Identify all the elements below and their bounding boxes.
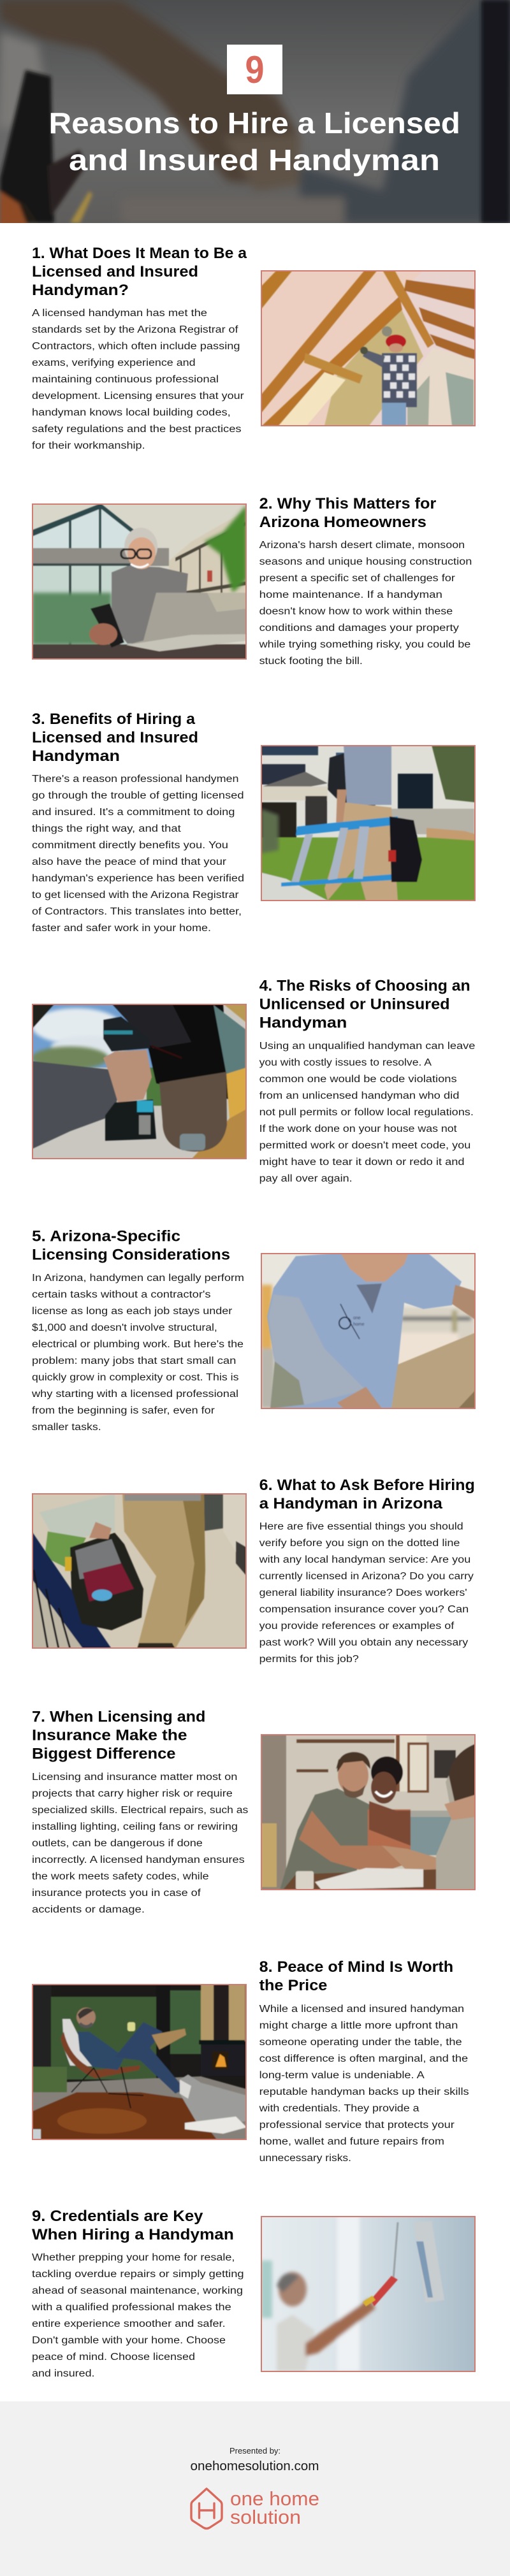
body text 7: Licensing and insurance matter most on [32, 1772, 237, 1783]
panel: section 8 [32, 1958, 469, 2164]
heading 7: Biggest Difference [32, 1745, 176, 1763]
body text 8: professional service that protects your [259, 2120, 455, 2131]
heading 1: Handyman? [32, 282, 129, 299]
body text 6: you provide references or examples of [259, 1621, 455, 1632]
heading 4: Handyman [259, 1015, 347, 1031]
body text 7: installing lighting, ceiling fans or rewiring [32, 1821, 238, 1832]
body text 8: with credentials. They provide a [258, 2103, 419, 2114]
body text 3: of Contractors. This translates into better, [32, 906, 242, 917]
photo: handyman carrying ladder [261, 745, 476, 901]
icon: house with H [191, 2489, 222, 2529]
body text 2: Arizona's harsh desert climate, monsoon [259, 540, 465, 551]
body text 1: development. Licensing ensures that your [32, 391, 244, 402]
body text 4: pay all over again. [259, 1173, 353, 1184]
body text 4 [259, 1041, 475, 1184]
body text 7: insurance protects you in case of [32, 1888, 201, 1899]
body text 2: conditions and damages your property [259, 623, 459, 633]
logo wordmark: one home [230, 2487, 319, 2510]
body text 7: specialized skills. Electrical repairs, such as [32, 1805, 249, 1816]
heading 2: Arizona Homeowners [259, 514, 426, 531]
body text 8 [258, 2004, 469, 2164]
body text 5: license as long as each job stays under [32, 1306, 232, 1317]
heading 1: 1. What Does It Mean to Be a [32, 245, 247, 262]
heading 4: 4. The Risks of Choosing an [259, 978, 470, 994]
body text 4: common one would be code violations [259, 1074, 457, 1085]
body text 9: entire experience smoother and safer. [32, 2319, 226, 2329]
body text 8: home, wallet and future repairs from [259, 2136, 444, 2147]
body text 3: commitment directly benefits you. You [32, 840, 228, 851]
body text 3 [32, 774, 244, 934]
body text 3: things the right way, and that [32, 823, 182, 834]
body text 2: while trying something risky, you could be [258, 639, 470, 650]
panel: section 4 [32, 978, 475, 1184]
body text 1: for their workmanship. [32, 440, 145, 451]
heading 4 [259, 978, 470, 1031]
body text 4: might have to tear it down or redo it and [259, 1157, 465, 1168]
heading 7 [32, 1708, 205, 1763]
photo: worker in branded shirt: one [353, 1316, 361, 1321]
website url: onehomesolution.com [190, 2459, 319, 2473]
body text 1: exams, verifying experience and [32, 358, 196, 368]
logo wordmark [230, 2487, 319, 2528]
photo: woman with phone and laptop [32, 503, 247, 659]
body text 3: to get licensed with the Arizona Registrar [32, 890, 239, 901]
body text 3: handyman's experience has been verified [32, 873, 244, 884]
body text 6: currently licensed in Arizona? Do you carry [259, 1571, 474, 1582]
logo wordmark: solution [230, 2506, 301, 2528]
body text 2: stuck footing the bill. [259, 656, 363, 667]
heading 2 [259, 495, 436, 531]
body text 8: reputable handyman backs up their skills [259, 2087, 469, 2097]
body text 7: the work meets safety codes, while [32, 1871, 209, 1882]
body text 8: might charge a little more upfront than [259, 2020, 458, 2031]
panel: section 2 [32, 495, 472, 667]
heading 3: 3. Benefits of Hiring a [32, 711, 196, 728]
body text 5: smaller tasks. [32, 1422, 101, 1433]
body text 6: with any local handyman service: Are you [258, 1554, 470, 1565]
body text 3: go through the trouble of getting licensed [32, 790, 244, 801]
body text 1: standards set by the Arizona Registrar of [32, 324, 238, 335]
body text 8: long-term value is undeniable. A [259, 2070, 425, 2081]
heading 5: 5. Arizona-Specific [32, 1227, 180, 1245]
body text 1: Contractors, which often include passing [32, 341, 240, 352]
photo: painter with roller [261, 2216, 476, 2371]
photo: attic insulation [261, 270, 476, 426]
body text 9: with a qualified professional makes the [31, 2302, 231, 2313]
photo: worker in branded shirt [261, 1253, 476, 1408]
photo: cordless drill at mailbox [32, 1004, 247, 1159]
body text 9: tackling overdue repairs or simply getting [32, 2269, 244, 2280]
body text 4: permitted work or doesn't meet code, you [259, 1140, 470, 1151]
heading 3 [32, 711, 198, 765]
heading 9 [32, 2208, 234, 2243]
body text 1: maintaining continuous professional [32, 374, 219, 385]
body text 5: In Arizona, handymen can legally perform [32, 1273, 244, 1284]
body text 1 [32, 308, 244, 451]
body text 8: someone operating under the table, the [259, 2037, 462, 2048]
panel: section 3 [32, 711, 476, 934]
heading 8 [259, 1958, 453, 1994]
body text 3: There's a reason professional handymen [32, 774, 238, 785]
body text 4: you with costly issues to resolve. A [259, 1057, 432, 1068]
photo: legs and tool bag on steps [32, 1493, 247, 1649]
body text 7 [32, 1772, 249, 1915]
panel: section 9 [31, 2208, 476, 2379]
body text 5: certain tasks without a contractor's [32, 1289, 211, 1300]
body text 6: verify before you sign on the dotted line [259, 1538, 460, 1549]
photo: man relaxing by wood stove [32, 1984, 247, 2139]
body text 6 [258, 1521, 474, 1665]
heading 1 [32, 245, 247, 299]
body text 9 [31, 2252, 244, 2379]
body text 9: Whether prepping your home for resale, [32, 2252, 235, 2263]
panel: section 5 [31, 1227, 476, 1433]
heading 3: Licensed and Insured [32, 729, 198, 746]
body text 9: ahead of seasonal maintenance, working [32, 2285, 243, 2296]
body text 8: unnecessary risks. [259, 2153, 351, 2164]
heading 7: 7. When Licensing and [32, 1708, 205, 1726]
logo: one home solution [191, 2487, 319, 2529]
heading 9: When Hiring a Handyman [32, 2226, 234, 2243]
body text 4: If the work done on your house was not [259, 1124, 457, 1134]
body text 7: accidents or damage. [32, 1904, 145, 1915]
body text 2 [258, 540, 472, 667]
heading 5 [32, 1227, 230, 1263]
body text 9: peace of mind. Choose licensed [32, 2352, 195, 2363]
body text 5: electrical or plumbing work. But here's the [32, 1339, 244, 1350]
badge with number 9: 9 [245, 48, 264, 91]
photo: worker in branded shirt: home [353, 1322, 365, 1327]
body text 1: A licensed handyman has met the [32, 308, 207, 319]
photo: couple shaking hands in kitchen [261, 1734, 476, 1890]
body text 8: cost difference is often marginal, and the [259, 2053, 468, 2064]
body text 9: Don't gamble with your home. Choose [32, 2335, 226, 2346]
body text 7: incorrectly. A licensed handyman ensures [32, 1855, 245, 1865]
panel: section 1 [32, 245, 476, 451]
presented by label: Presented by: [229, 2447, 280, 2456]
body text 7: projects that carry higher risk or require [32, 1788, 233, 1799]
body text 8: While a licensed and insured handyman [259, 2004, 464, 2015]
heading 5: Licensing Considerations [32, 1247, 230, 1263]
heading 1: Licensed and Insured [32, 263, 198, 280]
body text 2: home maintenance. If a handyman [259, 590, 442, 600]
heading 8: the Price [259, 1977, 327, 1994]
heading 4: Unlicensed or Uninsured [259, 995, 450, 1013]
body text 5: quickly grow in complexity or cost. This is [32, 1372, 239, 1383]
heading 9: 9. Credentials are Key [32, 2208, 203, 2225]
body text 3: faster and safer work in your home. [32, 923, 211, 934]
body text 1: handyman knows local building codes, [32, 407, 231, 418]
body text 4: not pull permits or follow local regulations. [259, 1107, 474, 1118]
body text 5: $1,000 and doesn't involve structural, [32, 1322, 217, 1333]
body text 5: why starting with a licensed professional [31, 1389, 238, 1400]
body text 3: also have the peace of mind that your [32, 857, 226, 867]
heading 6 [259, 1477, 475, 1512]
body text 5: from the beginning is safer, even for [32, 1405, 215, 1416]
body text 9: and insured. [32, 2368, 94, 2379]
body text 4: from an unlicensed handyman who did [259, 1090, 459, 1101]
panel: section 7 [32, 1708, 476, 1915]
title [48, 106, 460, 177]
body text 2: doesn't know how to work within these [259, 606, 453, 617]
heading 7: Insurance Make the [32, 1727, 187, 1744]
body text 2: seasons and unique housing construction [259, 556, 472, 567]
header banner [0, 0, 510, 280]
body text 6: compensation insurance cover you? Can [259, 1604, 469, 1615]
body text 6: general liability insurance? Does workers' [259, 1588, 467, 1598]
body text 1: safety regulations and the best practices [32, 424, 242, 435]
body text 6: permits for this job? [259, 1654, 359, 1665]
title: and Insured Handyman [69, 143, 440, 177]
heading 8: 8. Peace of Mind Is Worth [259, 1958, 453, 1976]
body text 5 [31, 1273, 244, 1433]
body text 7: outlets, can be dangerous if done [32, 1838, 203, 1849]
body text 2: present a specific set of challenges for [259, 573, 455, 584]
panel: section 6 [32, 1477, 475, 1665]
body text 6: Here are five essential things you should [259, 1521, 463, 1532]
title: Reasons to Hire a Licensed [48, 106, 460, 140]
body text 6: past work? Will you obtain any necessary [259, 1637, 468, 1648]
body text 4: Using an unqualified handyman can leave [259, 1041, 475, 1052]
footer panel [0, 2401, 510, 2576]
body text 5: problem: many jobs that start small can [32, 1356, 236, 1366]
heading 6: 6. What to Ask Before Hiring [259, 1477, 475, 1494]
heading 3: Handyman [32, 748, 120, 765]
badge with number 9 [227, 45, 282, 94]
body text 3: and insured. It's a commitment to doing [32, 807, 235, 818]
heading 6: a Handyman in Arizona [259, 1495, 443, 1512]
heading 2: 2. Why This Matters for [259, 495, 436, 512]
